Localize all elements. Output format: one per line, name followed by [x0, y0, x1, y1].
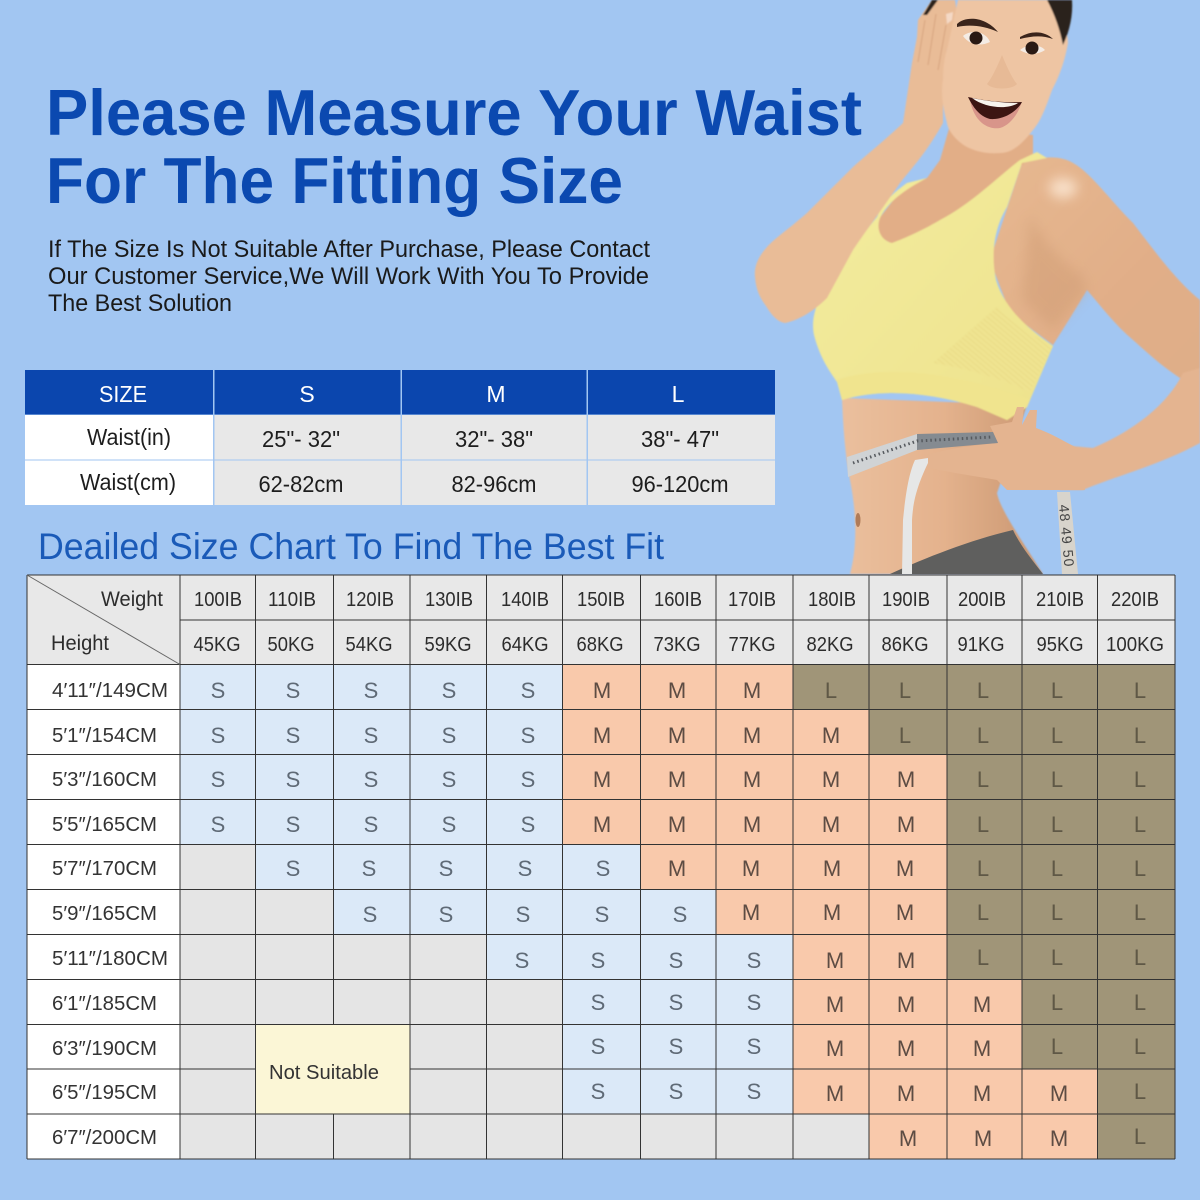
row 5'9 sizes: L	[977, 900, 989, 925]
row 5'11 sizes: L	[977, 945, 989, 970]
height labels: 5′1″/154CM	[52, 725, 157, 747]
row 4'11 sizes: S	[364, 678, 378, 703]
row 5'11 sizes: S	[515, 948, 529, 973]
height labels: 5′5″/165CM	[52, 814, 157, 836]
row 5'3 sizes: S	[521, 767, 535, 792]
waist inches row: Waist(in)	[87, 424, 171, 450]
row 6'5 sizes: M	[973, 1081, 991, 1106]
grid lines	[27, 575, 1175, 1159]
weight header in pounds: 120IB	[346, 589, 394, 611]
row 5'9 sizes	[363, 900, 1146, 927]
chart heading: Deailed Size Chart To Find The Best Fit	[38, 526, 665, 567]
weight header in kilograms: 100KG	[1106, 634, 1164, 656]
row 5'3 sizes: M	[593, 767, 611, 792]
finger creases	[918, 14, 946, 70]
row 4'11 sizes: L	[1051, 678, 1063, 703]
row 5'11 sizes: L	[1134, 945, 1146, 970]
row 5'7 sizes: L	[977, 856, 989, 881]
row 5'11 sizes: S	[669, 948, 683, 973]
size summary table	[25, 370, 775, 505]
row 4'11 sizes	[211, 678, 1146, 703]
row 5'7 sizes: L	[1051, 856, 1063, 881]
navel	[856, 513, 860, 527]
waist inches row: 38"- 47"	[641, 426, 719, 452]
weight header in kilograms: 59KG	[424, 634, 472, 656]
waist inches row: 32"- 38"	[455, 426, 533, 452]
row 6'7 sizes	[899, 1124, 1146, 1151]
row 5'7 sizes: M	[668, 856, 686, 881]
waist centimetres row: 82-96cm	[452, 471, 536, 497]
row 5'5 sizes: M	[593, 812, 611, 837]
row 4'11 sizes: L	[977, 678, 989, 703]
waist centimetres row: Waist(cm)	[80, 469, 176, 495]
row 6'3 sizes: L	[1134, 1034, 1146, 1059]
row 6'5 sizes: S	[747, 1079, 761, 1104]
row 5'5 sizes: S	[286, 812, 300, 837]
table header: L	[672, 381, 685, 407]
row 4'11 sizes: S	[286, 678, 300, 703]
row 5'1 sizes: S	[286, 723, 300, 748]
height labels: 5′3″/160CM	[52, 769, 157, 791]
facial features	[957, 19, 1053, 128]
weight header in kilograms: 82KG	[806, 634, 854, 656]
row 6'3 sizes: L	[1051, 1034, 1063, 1059]
intro text block: The Best Solution	[48, 290, 232, 317]
row 5'1 sizes: M	[822, 723, 840, 748]
height labels	[52, 680, 168, 1149]
row 5'1 sizes: L	[1134, 723, 1146, 748]
table header: M	[486, 381, 506, 407]
row 5'1 sizes: L	[977, 723, 989, 748]
row 5'9 sizes: S	[673, 902, 687, 927]
trousers	[890, 530, 1043, 574]
row 5'9 sizes: L	[1051, 900, 1063, 925]
weight header in kilograms: 68KG	[576, 634, 624, 656]
row 4'11 sizes: L	[825, 678, 837, 703]
row 5'7 sizes: S	[518, 856, 532, 881]
row 5'7 sizes	[286, 856, 1146, 881]
weight header in pounds: 170IB	[728, 589, 776, 611]
row 5'3 sizes	[211, 767, 1146, 792]
photo: woman measuring waist with tape	[755, 0, 1200, 574]
measuring tape: 48 49 50	[1056, 504, 1077, 567]
bra	[813, 152, 1053, 420]
row 5'5 sizes: S	[442, 812, 456, 837]
row 6'1 sizes: M	[826, 992, 844, 1017]
row 6'3 sizes: S	[747, 1034, 761, 1059]
waist inches row: 25"- 32"	[262, 426, 340, 452]
row 6'3 sizes	[591, 1034, 1146, 1061]
row 5'1 sizes: M	[743, 723, 761, 748]
row 6'3 sizes: M	[897, 1036, 915, 1061]
row 6'5 sizes: M	[826, 1081, 844, 1106]
row 5'9 sizes: M	[896, 900, 914, 925]
torso	[842, 398, 1043, 574]
height labels: 5′7″/170CM	[52, 858, 157, 880]
waist centimetres row: 62-82cm	[258, 471, 344, 497]
height labels: 5′11″/180CM	[52, 948, 168, 970]
intro text block: Our Customer Service,We Will Work With You To Provide	[48, 263, 649, 290]
weight header in pounds: 180IB	[808, 589, 856, 611]
corner header labels: Height	[51, 632, 109, 655]
title	[46, 76, 862, 217]
row 6'1 sizes: L	[1134, 990, 1146, 1015]
row 5'9 sizes: M	[742, 900, 760, 925]
table header: S	[299, 381, 315, 407]
row 5'1 sizes	[211, 723, 1146, 748]
corner header labels: Weight	[101, 588, 163, 611]
corner diagonal	[27, 575, 180, 664]
weight header in pounds: 150IB	[577, 589, 625, 611]
row 5'5 sizes	[211, 812, 1146, 837]
row 5'3 sizes: M	[897, 767, 915, 792]
title: Please Measure Your Waist	[46, 76, 862, 149]
weight header in pounds	[194, 589, 1159, 611]
row 6'3 sizes: S	[591, 1034, 605, 1059]
waist centimetres row	[25, 460, 775, 505]
weight header in pounds: 130IB	[425, 589, 473, 611]
height labels: 4′11″/149CM	[52, 680, 168, 702]
weight header in kilograms: 86KG	[882, 634, 928, 656]
weight header in kilograms: 45KG	[194, 634, 240, 656]
weight header in kilograms: 73KG	[654, 634, 700, 656]
row 5'3 sizes: M	[743, 767, 761, 792]
row 5'5 sizes: L	[977, 812, 989, 837]
row 5'5 sizes: L	[1134, 812, 1146, 837]
row 5'1 sizes: S	[211, 723, 225, 748]
height labels: 6′3″/190CM	[52, 1038, 157, 1060]
row 6'1 sizes: L	[1051, 990, 1063, 1015]
fingernail on temple	[946, 12, 953, 24]
neck and chest	[878, 125, 1033, 244]
weight header in pounds: 210IB	[1036, 589, 1084, 611]
row 5'11 sizes: M	[897, 948, 915, 973]
row 5'3 sizes: M	[822, 767, 840, 792]
row 4'11 sizes: M	[743, 678, 761, 703]
row 5'11 sizes: S	[591, 948, 605, 973]
detailed size chart	[27, 575, 1175, 1159]
weight header in pounds: 220IB	[1111, 589, 1159, 611]
not suitable cell	[256, 1024, 410, 1114]
row 5'1 sizes: M	[668, 723, 686, 748]
row 4'11 sizes: L	[1134, 678, 1146, 703]
height labels: 6′7″/200CM	[52, 1127, 157, 1149]
weight header in kilograms: 77KG	[728, 634, 776, 656]
height labels: 5′9″/165CM	[52, 903, 157, 925]
row 6'3 sizes: S	[669, 1034, 683, 1059]
weight header in pounds: 160IB	[654, 589, 702, 611]
row 4'11 sizes: L	[899, 678, 911, 703]
row 4'11 sizes: S	[442, 678, 456, 703]
row 5'3 sizes: L	[1134, 767, 1146, 792]
face	[942, 0, 1068, 153]
row 6'5 sizes: L	[1134, 1079, 1146, 1104]
row 5'1 sizes: L	[1051, 723, 1063, 748]
row 6'5 sizes	[591, 1079, 1146, 1106]
row 5'11 sizes	[515, 945, 1146, 973]
title: For The Fitting Size	[46, 144, 623, 217]
waist centimetres row: 96-120cm	[632, 471, 728, 497]
forearm on hip	[1060, 368, 1200, 490]
row 6'1 sizes: M	[897, 992, 915, 1017]
weight header in kilograms: 64KG	[502, 634, 548, 656]
row 5'7 sizes: S	[439, 856, 453, 881]
row 4'11 sizes: S	[211, 678, 225, 703]
row 5'9 sizes: S	[595, 902, 609, 927]
row 5'5 sizes: S	[521, 812, 535, 837]
row 5'3 sizes: L	[1051, 767, 1063, 792]
shoulder highlight and armpit shading	[1049, 178, 1077, 198]
row 6'7 sizes: L	[1134, 1124, 1146, 1149]
row 5'9 sizes: L	[1134, 900, 1146, 925]
weight header in pounds: 200IB	[958, 589, 1006, 611]
row 5'3 sizes: S	[286, 767, 300, 792]
bra mesh panel	[933, 307, 1053, 392]
row 4'11 sizes: M	[668, 678, 686, 703]
row 5'7 sizes: S	[286, 856, 300, 881]
row 6'3 sizes: M	[973, 1036, 991, 1061]
row 5'11 sizes: L	[1051, 945, 1063, 970]
row 5'1 sizes: S	[521, 723, 535, 748]
waist inches row	[25, 415, 775, 460]
raised forearm and hand	[755, 0, 958, 323]
row 5'5 sizes: L	[1051, 812, 1063, 837]
row 6'7 sizes: M	[974, 1126, 992, 1151]
waist hand	[927, 407, 1085, 490]
weight header in kilograms: 95KG	[1036, 634, 1084, 656]
measuring tape	[847, 432, 1078, 574]
row 6'5 sizes: S	[669, 1079, 683, 1104]
chart cell fills	[27, 575, 1175, 1159]
bra band	[837, 372, 1030, 420]
table header	[25, 370, 775, 414]
weight header in pounds: 140IB	[501, 589, 549, 611]
weight header in kilograms: 91KG	[958, 634, 1004, 656]
row 5'3 sizes: M	[668, 767, 686, 792]
row 5'5 sizes: M	[743, 812, 761, 837]
row 5'5 sizes: M	[668, 812, 686, 837]
row 5'9 sizes: S	[516, 902, 530, 927]
row 6'7 sizes: M	[899, 1126, 917, 1151]
row 5'7 sizes: S	[362, 856, 376, 881]
row 6'7 sizes: M	[1050, 1126, 1068, 1151]
hair	[1047, 0, 1072, 45]
row 5'3 sizes: S	[364, 767, 378, 792]
intro text block: If The Size Is Not Suitable After Purchase, Please Contact	[48, 236, 650, 263]
row 5'11 sizes: M	[826, 948, 844, 973]
row 6'1 sizes: M	[973, 992, 991, 1017]
row 6'1 sizes: S	[669, 990, 683, 1015]
row 6'1 sizes: S	[747, 990, 761, 1015]
corner header labels	[51, 588, 163, 655]
row 5'5 sizes: S	[211, 812, 225, 837]
weight header in kilograms	[194, 634, 1164, 656]
row 5'5 sizes: M	[897, 812, 915, 837]
table header: SIZE	[99, 381, 147, 407]
height labels: 6′1″/185CM	[52, 993, 157, 1015]
row 6'3 sizes: M	[826, 1036, 844, 1061]
row 4'11 sizes: S	[521, 678, 535, 703]
row 6'1 sizes: S	[591, 990, 605, 1015]
row 5'5 sizes: S	[364, 812, 378, 837]
row 5'9 sizes: M	[823, 900, 841, 925]
row 5'7 sizes: S	[596, 856, 610, 881]
row 5'1 sizes: M	[593, 723, 611, 748]
upper arm and shoulder	[990, 157, 1200, 380]
row 5'3 sizes: L	[977, 767, 989, 792]
weight header in pounds: 190IB	[882, 589, 930, 611]
row 5'1 sizes: L	[899, 723, 911, 748]
row 6'5 sizes: S	[591, 1079, 605, 1104]
intro text block	[48, 236, 650, 317]
row 5'9 sizes: S	[363, 902, 377, 927]
row 5'1 sizes: S	[364, 723, 378, 748]
height labels: 6′5″/195CM	[52, 1082, 157, 1104]
weight header in pounds: 100IB	[194, 589, 242, 611]
row 5'3 sizes: S	[442, 767, 456, 792]
row 6'5 sizes: M	[1050, 1081, 1068, 1106]
row 5'5 sizes: M	[822, 812, 840, 837]
row 5'7 sizes: M	[742, 856, 760, 881]
row 4'11 sizes: M	[593, 678, 611, 703]
row 5'3 sizes: S	[211, 767, 225, 792]
row 5'1 sizes: S	[442, 723, 456, 748]
row 5'7 sizes: M	[823, 856, 841, 881]
row 6'1 sizes	[591, 990, 1146, 1017]
row 5'7 sizes: L	[1134, 856, 1146, 881]
row 5'11 sizes: S	[747, 948, 761, 973]
weight header in pounds: 110IB	[268, 589, 316, 611]
not suitable cell: Not Suitable	[269, 1062, 379, 1084]
weight header in kilograms: 54KG	[346, 634, 392, 656]
row 5'9 sizes: S	[439, 902, 453, 927]
row 5'7 sizes: M	[896, 856, 914, 881]
weight header in kilograms: 50KG	[268, 634, 314, 656]
row 6'5 sizes: M	[897, 1081, 915, 1106]
